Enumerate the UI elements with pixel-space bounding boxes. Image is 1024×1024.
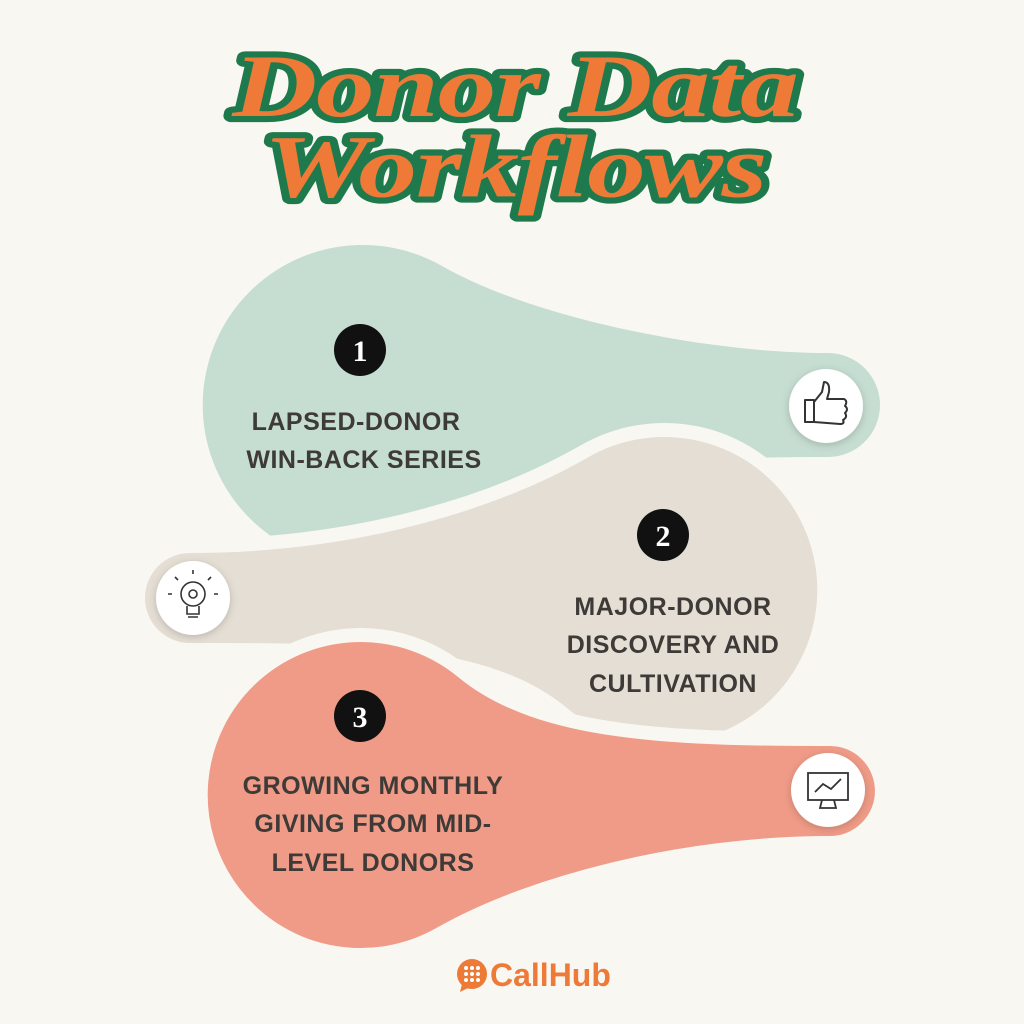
number badge 2	[637, 509, 689, 561]
title	[231, 36, 798, 216]
number badge 1: 1	[352, 335, 368, 368]
panel: workflow 3	[201, 635, 882, 955]
number badge 3	[334, 690, 386, 742]
icon: lightbulb	[156, 561, 230, 635]
title: Workflows	[264, 117, 766, 216]
panel: workflow 1	[203, 245, 880, 565]
icon: thumbs up	[789, 369, 863, 443]
text: workflow 1: LAPSED-DONOR	[252, 408, 460, 436]
text: workflow 3: LEVEL DONORS	[272, 849, 474, 877]
icon: monitor chart	[791, 753, 865, 827]
title: Donor Data	[231, 36, 798, 136]
number badge 1	[334, 324, 386, 376]
text: workflow 1: WIN-BACK SERIES	[246, 446, 482, 474]
logo: CallHub: CallHub	[490, 957, 611, 993]
text: workflow 3: GIVING FROM MID-	[254, 810, 492, 838]
text: workflow 2: MAJOR-DONOR	[574, 593, 772, 621]
text: workflow 2: DISCOVERY AND	[567, 631, 779, 659]
number badge 2: 2	[656, 520, 670, 553]
text: workflow 2: CULTIVATION	[589, 670, 757, 698]
text: workflow 3: GROWING MONTHLY	[243, 772, 503, 800]
panel: workflow 2	[138, 430, 824, 750]
number badge 3: 3	[352, 701, 368, 734]
